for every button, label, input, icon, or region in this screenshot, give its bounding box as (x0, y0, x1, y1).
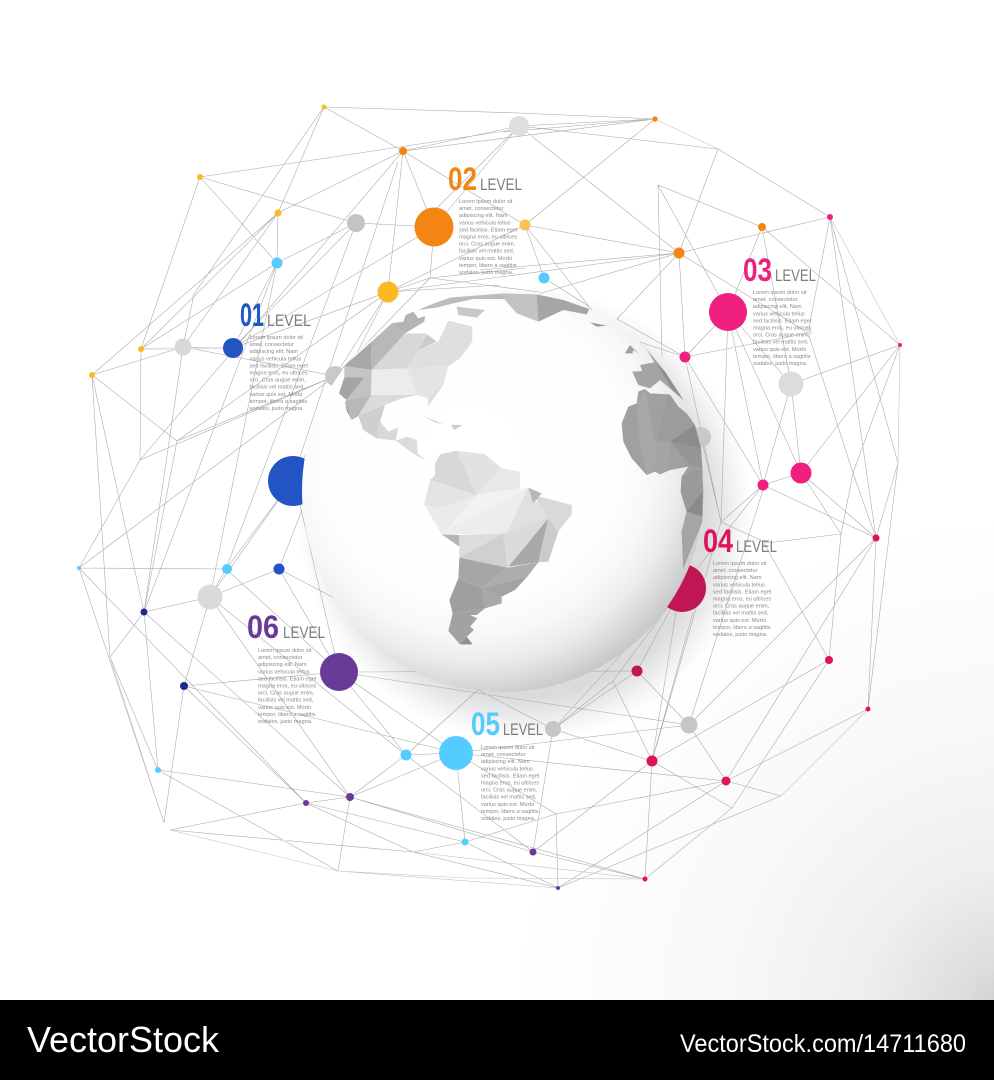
body text: Lorem ipsum dolor sit (713, 561, 767, 567)
heading level: LEVEL (267, 311, 311, 330)
body text: sodales, justo magna. (753, 361, 808, 367)
body text: varius vehicula tellus (753, 311, 805, 317)
nodes: level 02 orange and yellow (89, 104, 766, 378)
nodes: level 03 pink (680, 214, 902, 490)
body text: orci. Cras augue enim, (481, 788, 538, 794)
body text: amet, consectetur (481, 752, 526, 758)
north america (339, 312, 472, 460)
body text: varius quis est. Morbi (250, 392, 302, 398)
body text: magna eros, eu ultrices (250, 370, 308, 376)
body text: sed facilisis. Etiam eget (481, 773, 540, 779)
body text: facilisis vel mattis sed, (258, 698, 314, 704)
body text: sodales, justo magna. (250, 406, 304, 412)
body text: varius vehicula tellus (713, 582, 765, 588)
nodes: level 04 crimson (632, 534, 880, 882)
body text: sed facilisis. Etiam eget (713, 589, 772, 595)
body text: varius quis est. Morbi (713, 618, 766, 624)
body text: tempor, libero a sagittis (258, 712, 316, 718)
body text: amet, consectetur (258, 655, 303, 661)
heading 04: 04 (703, 523, 733, 559)
body text: orci. Cras augue enim, (258, 691, 315, 697)
nodes: neutral grey (174, 116, 812, 737)
body text: facilisis vel mattis sed, (713, 611, 769, 617)
footer image id: VectorStock.com/14711680 (680, 1030, 966, 1058)
body text: varius quis est. Morbi (459, 256, 512, 262)
body text: varius vehicula tellus (250, 356, 301, 362)
level 02 label (448, 161, 522, 276)
globe drop shadow (297, 287, 753, 743)
heading level: LEVEL (736, 537, 777, 556)
heading 02: 02 (448, 161, 477, 197)
body text: sodales, justo magna. (481, 816, 536, 822)
level 04 label (703, 523, 777, 638)
body text: amet, consectetur (753, 297, 798, 303)
europe and africa (622, 345, 703, 568)
body text: magna eros, eu ultrices (258, 684, 316, 690)
body text: magna eros, eu ultrices (753, 326, 811, 332)
body text: Lorem ipsum dolor sit (753, 290, 807, 296)
nodes: level 05 cyan (77, 258, 550, 846)
body text: amet, consectetur (250, 342, 294, 348)
level 01 label (240, 297, 311, 412)
body text: varius quis est. Morbi (481, 802, 534, 808)
body text: varius vehicula tellus (459, 220, 511, 226)
body text: amet, consectetur (713, 568, 758, 574)
body text: orci. Cras augue enim, (753, 333, 810, 339)
body text: adipiscing elit. Nam (258, 662, 307, 668)
body text: orci. Cras augue enim, (250, 378, 306, 384)
body text: magna eros, eu ultrices (713, 596, 771, 602)
body text: facilisis vel mattis sed, (481, 795, 537, 801)
heading level: LEVEL (775, 266, 816, 285)
body text: tempor, libero a sagittis (459, 263, 517, 269)
outer faint lines (110, 119, 900, 888)
south america (424, 451, 572, 644)
body text: adipiscing elit. Nam (481, 759, 530, 765)
body text: sed facilisis. Etiam eget (258, 676, 317, 682)
body text: sodales, justo magna. (258, 719, 313, 725)
body text: adipiscing elit. Nam (250, 349, 298, 355)
heading 06: 06 (247, 609, 279, 645)
body text: facilisis vel mattis sed, (459, 249, 515, 255)
body text: orci. Cras augue enim, (459, 242, 516, 248)
body text: magna eros, eu ultrices (459, 234, 517, 240)
body text: Lorem ipsum dolor sit (258, 648, 312, 654)
body text: tempor, libero a sagittis (250, 399, 307, 405)
heading level: LEVEL (283, 623, 325, 642)
body text: Lorem ipsum dolor sit (250, 335, 303, 341)
body text: varius vehicula tellus (258, 669, 310, 675)
body text: amet, consectetur (459, 206, 504, 212)
body text: orci. Cras augue enim, (713, 604, 770, 610)
body text: adipiscing elit. Nam (459, 213, 508, 219)
body text: tempor, libero a sagittis (481, 809, 539, 815)
body text: Lorem ipsum dolor sit (481, 745, 535, 751)
globe sphere (302, 290, 704, 692)
body text: facilisis vel mattis sed, (753, 340, 809, 346)
body text: tempor, libero a sagittis (713, 625, 771, 631)
body text: Lorem ipsum dolor sit (459, 199, 513, 205)
arctic and greenland (418, 293, 607, 327)
body text: facilisis vel mattis sed, (250, 385, 305, 391)
body text: sodales, justo magna. (713, 632, 768, 638)
nodes: level 01 blue (223, 338, 318, 574)
body text: sodales, justo magna. (459, 270, 514, 276)
level 05 label (471, 706, 543, 822)
body text: tempor, libero a sagittis (753, 354, 811, 360)
body text: adipiscing elit. Nam (713, 575, 762, 581)
heading level: LEVEL (480, 175, 522, 194)
body text: varius quis est. Morbi (753, 347, 806, 353)
body text: varius vehicula tellus (481, 766, 533, 772)
level 06 label (247, 609, 325, 725)
heading 01: 01 (240, 297, 264, 333)
body text: adipiscing elit. Nam (753, 304, 802, 310)
nodes: level 06 purple and navy (140, 608, 560, 890)
globe (302, 290, 704, 692)
heading 05: 05 (471, 706, 500, 742)
body text: varius quis est. Morbi (258, 705, 311, 711)
body text: sed facilisis. Etiam eget (250, 363, 308, 369)
heading 03: 03 (743, 252, 772, 288)
footer bar (0, 1000, 994, 1080)
level 03 label (743, 252, 816, 367)
footer logo text: VectorStock (27, 1019, 220, 1060)
body text: magna eros, eu ultrices (481, 780, 539, 786)
body text: sed facilisis. Etiam eget (753, 318, 812, 324)
heading level: LEVEL (503, 720, 543, 739)
network lines (79, 107, 900, 888)
body text: sed facilisis. Etiam eget (459, 227, 518, 233)
